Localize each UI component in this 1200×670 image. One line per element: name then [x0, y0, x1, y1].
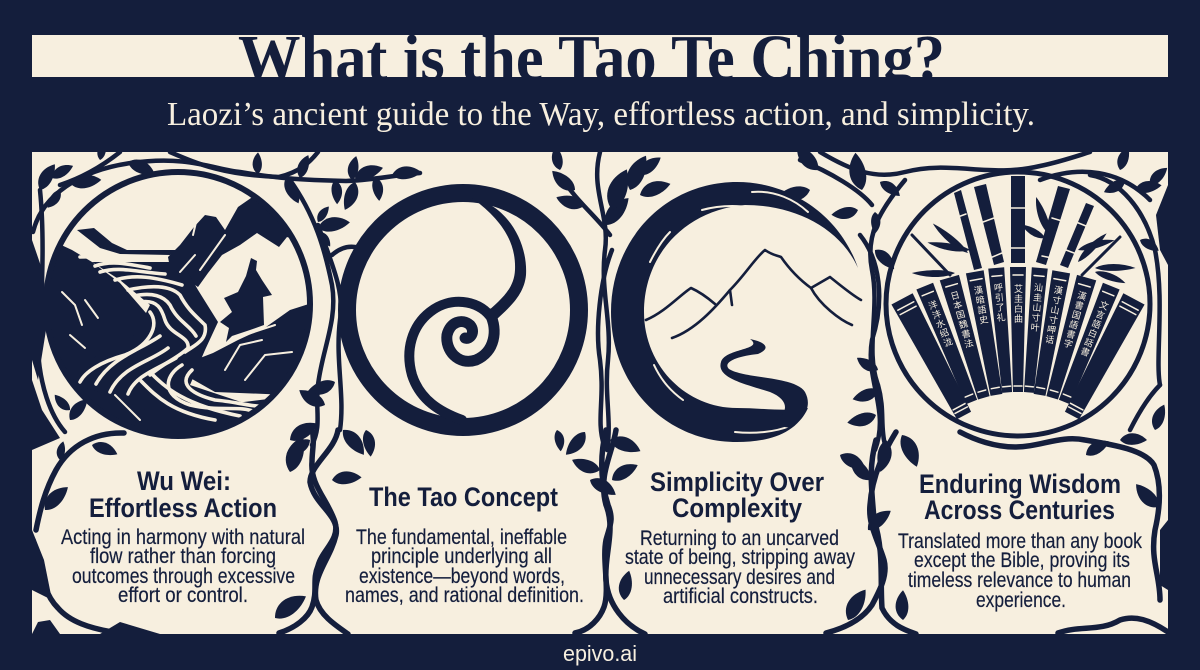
bottom land [80, 387, 265, 433]
circle 4: translated scrolls and bamboo [886, 172, 1150, 436]
text block: the tao concept: existence—beyond words, [359, 564, 565, 588]
right hill [192, 304, 307, 394]
text block: wu wei: outcomes through excessive [72, 564, 295, 588]
text block: wu wei: Wu Wei: [137, 466, 231, 496]
corner wedges [32, 185, 1168, 634]
text block: wu wei [61, 466, 305, 607]
text block: the tao concept: names, and rational definition. [345, 583, 584, 607]
cream river flow [80, 256, 280, 420]
text block: simplicity over complexity: Returning to an uncarved [640, 526, 839, 550]
leaves [34, 141, 1170, 624]
circle 2: tao spiral [347, 193, 579, 427]
text block: enduring wisdom across centuries: except the Bible, proving its [914, 548, 1130, 572]
text block: wu wei: Effortless Action [89, 493, 277, 523]
text block: simplicity over complexity: artificial constructs. [663, 584, 818, 608]
central peaks [168, 198, 289, 287]
text block: the tao concept: The fundamental, ineffable [356, 525, 567, 549]
scroll fan: 艾圭白曲 [1013, 284, 1023, 324]
vine network between circles [33, 152, 1160, 450]
text block: the tao concept: The Tao Concept [369, 482, 558, 512]
scroll fan: 日本国魏書法 [948, 290, 975, 350]
text block: enduring wisdom across centuries: Enduring Wisdom [919, 469, 1121, 499]
text block: wu wei: effort or control. [118, 583, 248, 607]
text block: simplicity over complexity [625, 467, 855, 608]
river base [92, 262, 241, 405]
text block: simplicity over complexity: Complexity [672, 493, 802, 523]
text block: enduring wisdom across centuries: Translated more than any book [898, 529, 1142, 553]
vines around text panels [33, 430, 1168, 634]
scroll fan: 汕圭山寸叶 [1029, 282, 1043, 333]
scroll fan: 漢暗語史 [972, 284, 989, 326]
text block: the tao concept [345, 482, 584, 607]
scroll fan: 洋沣水绍泷 [926, 298, 954, 349]
scroll fan: 呼引了礼 [993, 282, 1006, 323]
scroll fan: 文言語白話書 [1078, 298, 1110, 358]
title strip with heading [32, 35, 1168, 77]
text block: enduring wisdom across centuries: timeless relevance to human [908, 568, 1131, 592]
text block: simplicity over complexity: Simplicity Over [650, 467, 824, 497]
mountains [646, 250, 861, 338]
cliff and hill highlights [62, 218, 292, 420]
text block: enduring wisdom across centuries: experience. [976, 588, 1066, 612]
bamboo stalks [954, 176, 1094, 270]
text block: wu wei: flow rather than forcing [90, 544, 276, 568]
text block: enduring wisdom across centuries: Across Centuries [924, 495, 1115, 525]
river [720, 339, 808, 428]
left cliffs [49, 246, 146, 374]
scroll fan [891, 267, 1145, 421]
figure [220, 258, 272, 342]
text block: wu wei: Acting in harmony with natural [61, 525, 305, 549]
panel: papercut background with vines [32, 141, 1170, 634]
text block: simplicity over complexity: unnecessary desires and [644, 565, 835, 589]
text block: the tao concept: principle underlying all [371, 544, 552, 568]
enso brush ring [611, 182, 858, 442]
far mountain [77, 228, 179, 255]
footer brand: epivo.ai [563, 641, 637, 666]
title strip with heading: What is the Tao Te Ching? [238, 22, 945, 95]
scroll fan: 漢寸山寸呷话 [1043, 284, 1064, 346]
circle 1: wu wei river landscape [40, 172, 312, 450]
text block: enduring wisdom across centuries [898, 469, 1142, 612]
subtitle: Laozi’s ancient guide to the Way, effortless action, and simplicity. [167, 96, 1035, 133]
text block: simplicity over complexity: state of being, stripping away [625, 545, 855, 569]
bamboo leaves [912, 196, 1136, 286]
circle 3: enso with mountain and river [611, 182, 861, 442]
scroll fan: 漢書国語書字 [1061, 289, 1088, 350]
